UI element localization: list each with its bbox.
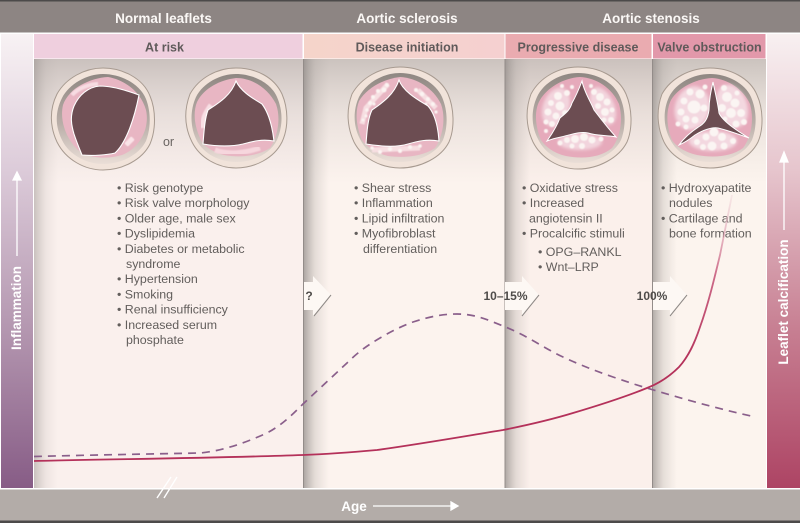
valve obstruction list: • Hydroxyapatite xyxy=(661,181,752,195)
disease initiation list: • Myofibroblast xyxy=(354,227,436,241)
progressive disease list: • Wnt–LRP xyxy=(538,260,599,274)
progression arrow: 10 to 15 percent xyxy=(483,276,539,316)
risk factors list: syndrome xyxy=(126,257,181,271)
risk factors list: • Risk valve morphology xyxy=(117,196,250,210)
subheader: disease initiation: Disease initiation xyxy=(356,40,458,54)
valve: aortic sclerosis, early calcification xyxy=(348,67,453,168)
progression arrow: unknown: ? xyxy=(305,289,313,303)
progressive disease list: • Oxidative stress xyxy=(522,181,618,195)
heading: aortic sclerosis: Aortic sclerosis xyxy=(356,11,458,26)
valve obstruction list xyxy=(661,181,752,241)
right axis strip: leaflet calcification xyxy=(767,34,800,488)
progressive disease list: • OPG–RANKL xyxy=(538,245,622,259)
subheader: at risk: At risk xyxy=(145,40,184,54)
panel: disease initiation column xyxy=(304,59,505,488)
risk factors list: • Older age, male sex xyxy=(117,211,236,225)
curve: inflammation (dashed) xyxy=(34,314,751,456)
subheader: valve obstruction xyxy=(653,34,766,58)
progression arrow: unknown xyxy=(304,276,331,316)
bottom band: age axis xyxy=(0,490,800,523)
axis break mark xyxy=(157,477,177,498)
panel: at risk column xyxy=(34,59,303,488)
disease initiation list: • Lipid infiltration xyxy=(354,211,445,225)
disease initiation list: • Inflammation xyxy=(354,196,433,210)
disease initiation list: differentiation xyxy=(363,242,437,256)
axis arrow: inflammation xyxy=(13,172,21,256)
valve: valve obstruction, heavily calcified xyxy=(658,68,762,168)
progressive disease list: • Procalcific stimuli xyxy=(522,227,625,241)
subheader: at risk xyxy=(34,34,302,58)
heading: normal leaflets: Normal leaflets xyxy=(115,11,212,26)
valve: progressive disease, tricuspid calcified xyxy=(527,67,631,169)
curve: leaflet calcification (solid) xyxy=(34,195,732,461)
panel: progressive disease column xyxy=(505,59,652,488)
axis arrow: leaflet calcification xyxy=(780,152,788,230)
panel: valve obstruction column xyxy=(652,59,766,488)
label: or: or xyxy=(163,135,174,149)
axis label: inflammation: Inflammation xyxy=(9,266,24,350)
progressive disease list: • Increased xyxy=(522,196,584,210)
risk factors list: • Risk genotype xyxy=(117,181,203,195)
risk factors list: • Smoking xyxy=(117,287,173,301)
top band: stage headings xyxy=(0,0,800,32)
progressive disease list: angiotensin II xyxy=(529,211,603,225)
axis label: age: Age xyxy=(341,499,367,514)
progression arrow: 10 to 15 percent: 10–15% xyxy=(483,289,528,303)
valve obstruction list: nodules xyxy=(669,196,712,210)
heading: aortic stenosis: Aortic stenosis xyxy=(602,11,700,26)
left axis strip: inflammation xyxy=(1,34,33,488)
disease initiation list xyxy=(354,181,445,256)
risk factors list: • Renal insufficiency xyxy=(117,303,229,317)
risk factors list xyxy=(117,181,250,347)
disease initiation list: • Shear stress xyxy=(354,181,431,195)
risk factors list: • Increased serum xyxy=(117,318,217,332)
axis label: leaflet calcification: Leaflet calcification xyxy=(776,239,791,365)
valve: normal leaflets, bicuspid with raphe xyxy=(186,68,287,168)
progression arrow: 100 percent xyxy=(637,276,687,316)
subheader: disease initiation xyxy=(304,34,504,58)
progressive disease list xyxy=(522,181,625,274)
subheader: valve obstruction: Valve obstruction xyxy=(657,40,762,54)
column dividers xyxy=(303,59,653,488)
risk factors list: phosphate xyxy=(126,333,184,347)
risk factors list: • Hypertension xyxy=(117,272,198,286)
subheader: progressive disease xyxy=(506,34,652,58)
valve obstruction list: • Cartilage and xyxy=(661,211,743,225)
axis arrow: age xyxy=(373,502,458,510)
valve: normal leaflets, bicuspid eccentric xyxy=(51,68,155,170)
risk factors list: • Dyslipidemia xyxy=(117,227,195,241)
subheader: progressive disease: Progressive disease xyxy=(518,40,638,54)
risk factors list: • Diabetes or metabolic xyxy=(117,242,245,256)
valve obstruction list: bone formation xyxy=(669,227,752,241)
progression arrow: 100 percent: 100% xyxy=(637,289,668,303)
